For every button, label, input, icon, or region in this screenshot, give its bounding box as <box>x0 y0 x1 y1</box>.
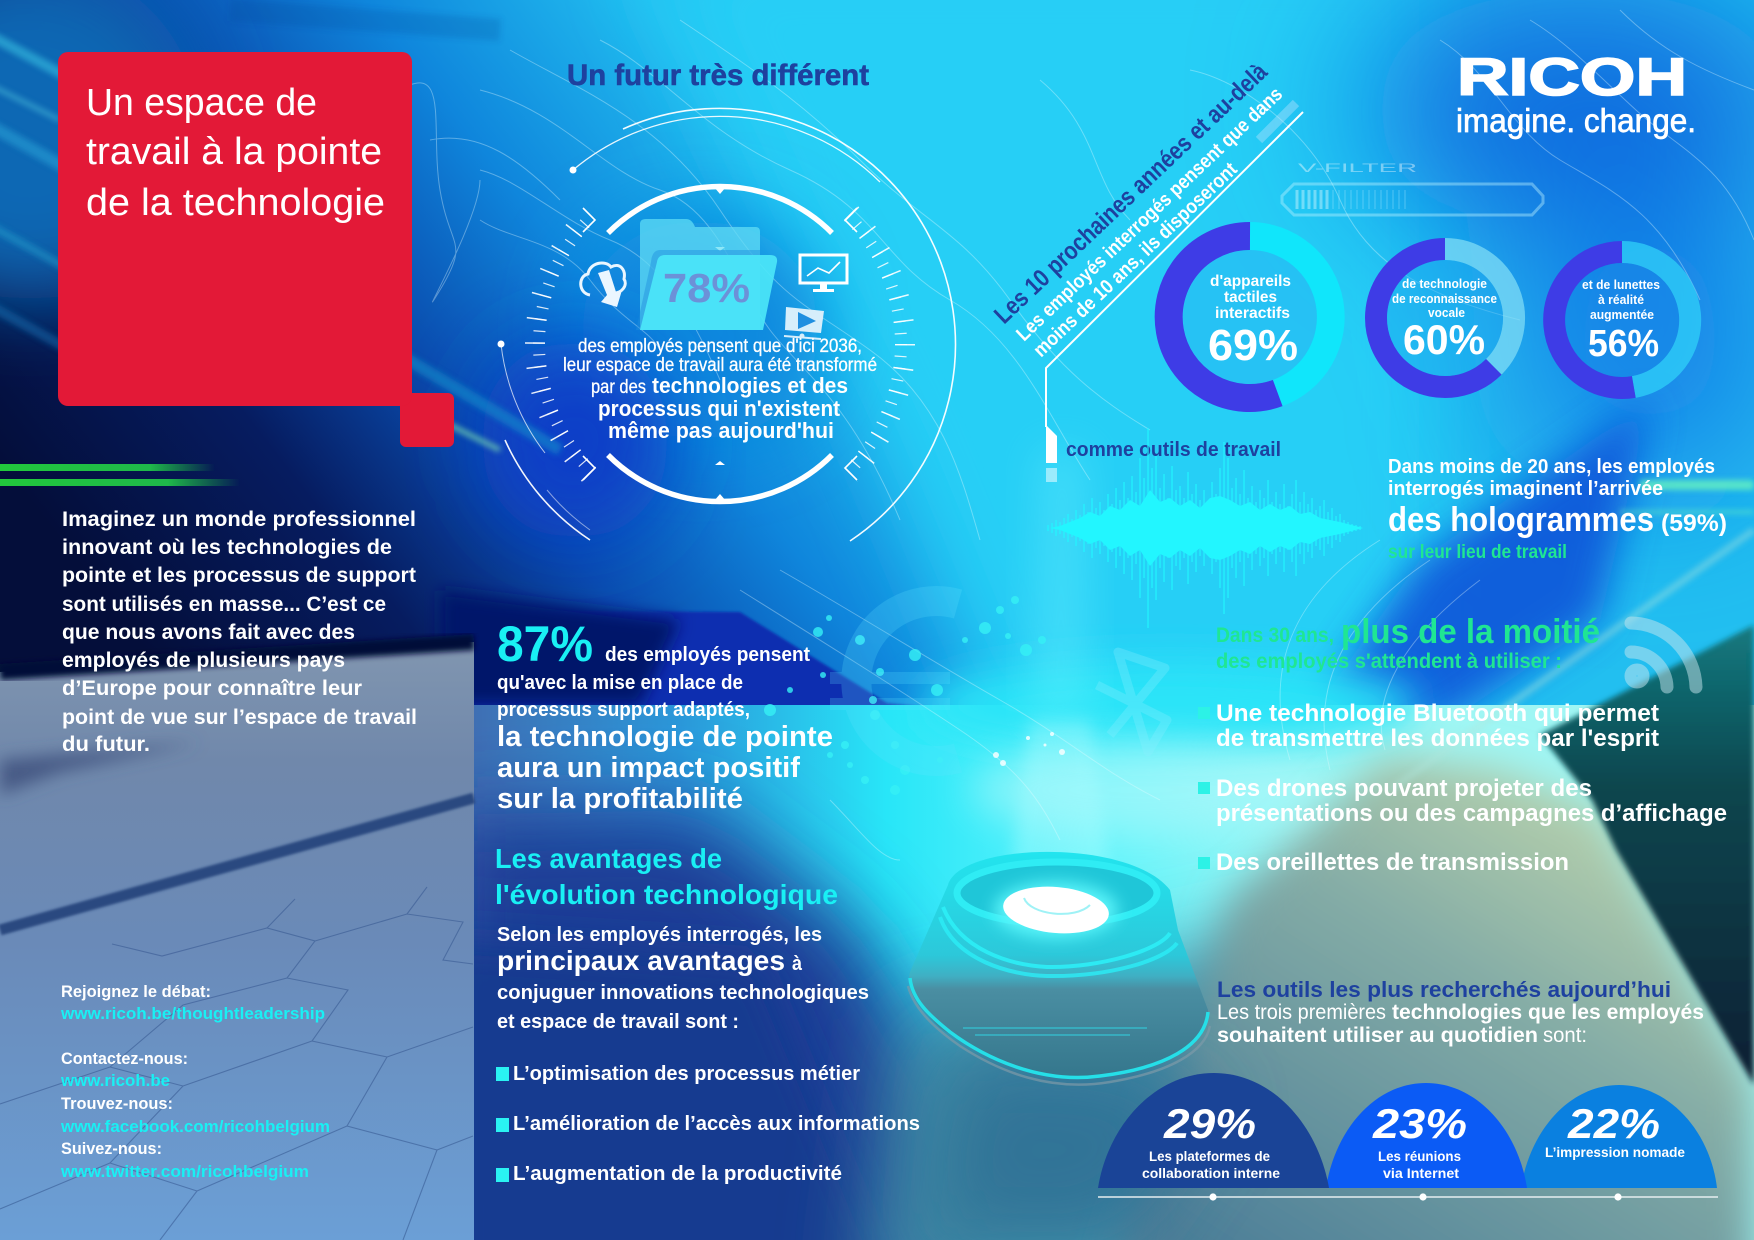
panel: 87% stat <box>497 616 833 815</box>
contact links <box>60 982 330 1181</box>
dial caption: leur espace de travail aura été transformé <box>563 355 877 376</box>
donut: 56%: augmentée <box>1590 308 1654 322</box>
faint V-FILTER gauge <box>1282 161 1543 215</box>
contact links: Contactez-nous: <box>61 1049 188 1068</box>
panel: holograms: interrogés imaginent l’arrivée <box>1388 478 1663 500</box>
logo: RICOH <box>1456 48 1696 139</box>
benefits heading: l'évolution technologique <box>495 879 838 910</box>
panel: 78% dial <box>498 108 955 541</box>
donut: 60%: de technologie <box>1402 277 1487 291</box>
tools intro: technologies que les employés <box>1392 1001 1704 1024</box>
heading: Un futur très différent: Un futur très différent <box>567 59 869 92</box>
dial rings <box>501 108 955 541</box>
benefits intro: Selon les employés interrogés, les <box>497 924 822 946</box>
list item: drones <box>1198 775 1727 827</box>
donut: 56%: et de lunettes <box>1582 278 1660 292</box>
dial caption: processus qui n'existent <box>598 396 841 421</box>
contact links: Suivez-nous: <box>61 1139 162 1158</box>
icon: video player <box>784 307 824 339</box>
panel: 87% stat: 87% <box>497 616 593 672</box>
list item: Bluetooth <box>1198 700 1659 752</box>
faint icon: euro <box>830 601 958 761</box>
panel: ten year outlook <box>989 58 1690 482</box>
benefit list: L’augmentation de la productivité <box>513 1163 842 1185</box>
donut: 69%: d'appareils <box>1210 273 1291 290</box>
panel: thirty year outlook: Dans 30 ans, <box>1216 624 1334 647</box>
dial caption: des employés pensent que d'ici 2036, <box>578 336 862 357</box>
dome: 23%: 23% <box>1372 1100 1467 1147</box>
list item: drones: Des drones pouvant projeter des <box>1216 775 1592 802</box>
panel: benefits <box>495 843 920 1185</box>
benefit list <box>496 1063 920 1185</box>
intro paragraph: pointe et les processus de support <box>62 564 416 587</box>
panel: holograms: des hologrammes <box>1388 501 1654 539</box>
list item: drones: présentations ou des campagnes d’affichage <box>1216 800 1727 827</box>
horizon: deep wedge and bright table <box>474 610 916 705</box>
tools intro: souhaitent utiliser au quotidien <box>1217 1024 1538 1047</box>
contact links: www.facebook.com/ricohbelgium <box>60 1117 330 1136</box>
contact links: Rejoignez le débat: <box>61 982 211 1001</box>
panel: 87% stat: qu'avec la mise en place de <box>497 672 743 694</box>
rotated intro: Les employés interrogés pensent que dans <box>1012 83 1287 346</box>
donut: 69%: 69% <box>1208 321 1298 370</box>
panel: thirty year outlook: des employés s'attendent à utiliser : <box>1216 650 1562 673</box>
donut: 69% <box>1169 236 1331 398</box>
dome: 29%: 29% <box>1163 1100 1256 1147</box>
dome: 23%: via Internet <box>1383 1165 1459 1181</box>
contact links: Trouvez-nous: <box>61 1094 173 1113</box>
caption: comme outils de travail: comme outils de travail <box>1066 439 1281 461</box>
decorative green bars <box>0 464 240 486</box>
panel: 87% stat: sur la profitabilité <box>497 783 743 815</box>
intro paragraph: du futur. <box>62 733 150 756</box>
donut: 56% <box>1554 252 1690 388</box>
title <box>86 82 385 224</box>
donut: 60% <box>1376 249 1514 387</box>
list item: Bluetooth: de transmettre les données par l'esprit <box>1216 725 1659 752</box>
dial ticks <box>525 206 915 482</box>
panel: 87% stat: aura un impact positif <box>497 752 800 784</box>
panel: red title box <box>58 52 454 447</box>
benefits intro: et espace de travail sont : <box>497 1011 739 1033</box>
panel: holograms: (59%) <box>1661 510 1727 537</box>
benefits heading <box>495 843 838 910</box>
particles <box>764 596 1046 795</box>
benefits intro: conjuguer innovations technologiques <box>497 982 869 1004</box>
donut: 69%: tactiles <box>1224 289 1277 306</box>
panel: 87% stat: des employés pensent <box>605 644 810 666</box>
contact links: www.ricoh.be/thoughtleadership <box>60 1004 325 1023</box>
dome: 29%: collaboration interne <box>1142 1165 1280 1181</box>
dome: 23%: Les réunions <box>1378 1148 1461 1164</box>
logo: RICOH: RICOH <box>1457 48 1687 107</box>
title: de la technologie <box>86 182 385 224</box>
icon: folder <box>636 219 777 330</box>
benefit list: L’amélioration de l’accès aux informations <box>513 1113 920 1135</box>
benefits intro: à <box>792 953 803 975</box>
intro paragraph: Imaginez un monde professionnel <box>62 508 416 531</box>
panel: 87% stat: processus support adaptés, <box>497 699 750 721</box>
right floor <box>1100 757 1754 1240</box>
dome: 22% <box>1521 1085 1717 1188</box>
dial caption <box>563 336 877 443</box>
contact links: www.ricoh.be <box>60 1071 170 1090</box>
benefit list: L’optimisation des processus métier <box>513 1063 860 1085</box>
light streaks <box>0 10 1754 790</box>
panel: thirty year outlook: plus de la moitié <box>1341 613 1600 651</box>
title: travail à la pointe <box>86 131 382 173</box>
list item: Bluetooth: Une technologie Bluetooth qui permet <box>1216 700 1659 727</box>
donut: 60%: 60% <box>1403 316 1485 363</box>
dial caption: technologies et des <box>652 373 848 398</box>
rotated heading: Les 10 prochaines années et au-delà <box>989 58 1273 329</box>
benefits intro <box>497 924 869 1033</box>
donut: 60%: de reconnaissance <box>1392 292 1497 306</box>
intro paragraph: employés de plusieurs pays <box>62 649 345 672</box>
donut: 69%: interactifs <box>1215 305 1290 322</box>
domes baseline <box>1098 1193 1718 1201</box>
intro paragraph <box>62 508 417 756</box>
intro paragraph: innovant où les technologies de <box>62 536 392 559</box>
dial caption: par des <box>591 377 646 398</box>
contact links: www.twitter.com/ricohbelgium <box>60 1162 309 1181</box>
intro paragraph: point de vue sur l’espace de travail <box>62 706 417 729</box>
list item: earpieces: Des oreillettes de transmission <box>1216 849 1569 876</box>
panel: 87% stat: la technologie de pointe <box>497 721 833 753</box>
panel: most wanted tools <box>1098 977 1718 1201</box>
contour lines <box>400 10 1754 860</box>
hologram beam <box>1010 720 1110 880</box>
donut: 60%: vocale <box>1428 306 1465 320</box>
icon: bluetooth <box>1097 652 1167 752</box>
panel: holograms: Dans moins de 20 ans, les employés <box>1388 456 1715 478</box>
title: Un espace de <box>86 82 317 124</box>
tools intro <box>1217 1001 1704 1047</box>
intro paragraph: sont utilisés en masse... C’est ce <box>62 593 386 616</box>
intro paragraph: d’Europe pour connaître leur <box>62 677 362 700</box>
dial caption: même pas aujourd'hui <box>608 418 834 443</box>
dome: 22%: L’impression nomade <box>1545 1144 1685 1160</box>
icon: cloud download <box>581 263 625 307</box>
panel: holograms <box>1388 456 1727 563</box>
rotated intro: moins de 10 ans, ils disposeront <box>1029 158 1242 362</box>
benefits intro: principaux avantages <box>497 945 785 976</box>
tools intro: Les trois premières <box>1217 1001 1386 1024</box>
dome: 22%: 22% <box>1567 1100 1660 1147</box>
intro paragraph: que nous avons fait avec des <box>62 621 355 644</box>
tools intro: sont: <box>1543 1024 1587 1047</box>
panel: thirty year outlook <box>1198 613 1727 876</box>
logo: RICOH: imagine. change. <box>1456 102 1696 139</box>
icon: wifi <box>1631 623 1696 687</box>
left floor <box>0 642 474 1240</box>
faint V-FILTER gauge: V-FILTER <box>1298 161 1418 175</box>
tools heading: Les outils les plus recherchés aujourd’hui <box>1217 977 1671 1002</box>
dome: 29%: Les plateformes de <box>1149 1148 1270 1164</box>
device: glowing hologram puck <box>908 852 1210 1085</box>
icon: monitor chart <box>800 255 847 292</box>
donut: 56%: à réalité <box>1598 293 1644 307</box>
panel: holograms: sur leur lieu de travail <box>1388 542 1567 563</box>
donut: 56%: 56% <box>1588 323 1659 365</box>
benefits heading: Les avantages de <box>495 843 722 874</box>
sound waveform <box>1048 428 1363 628</box>
stat: 78%: 78% <box>663 265 750 311</box>
dome: 29% <box>1098 1073 1329 1188</box>
connector line and marker <box>1046 103 1303 482</box>
dome: 23% <box>1326 1083 1527 1188</box>
